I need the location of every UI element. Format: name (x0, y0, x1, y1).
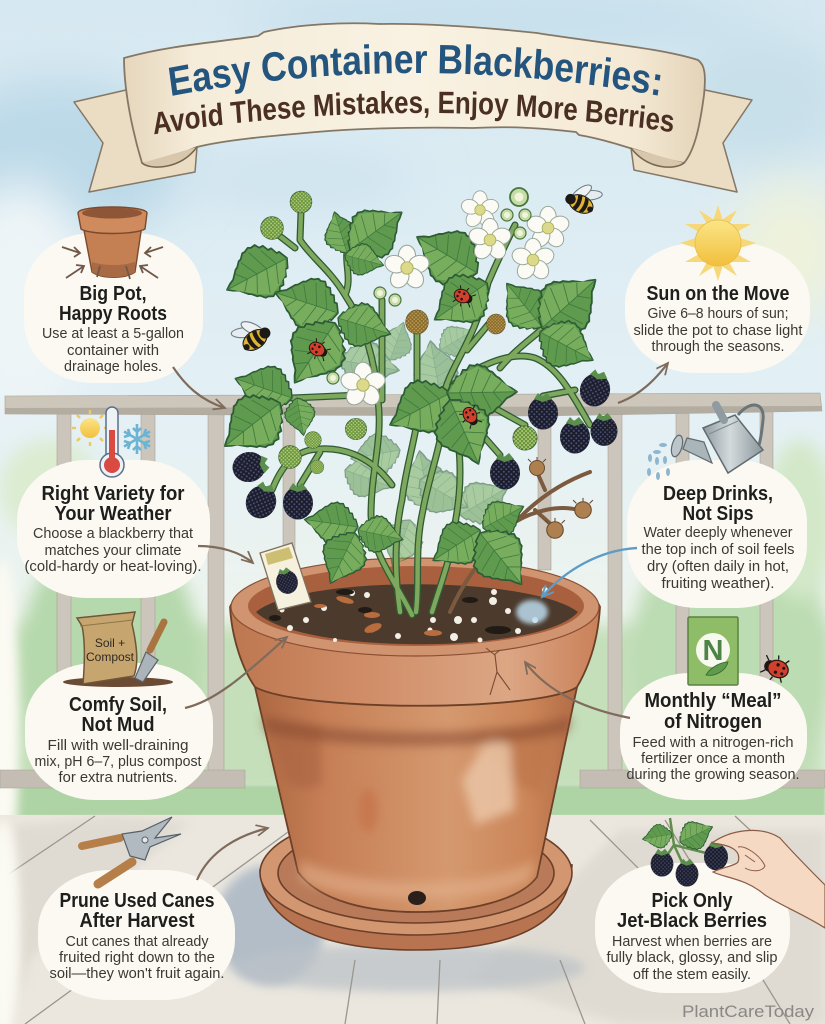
rim cracks (486, 648, 510, 695)
icon: hand picking berries (640, 814, 825, 928)
soil speckles (280, 587, 548, 642)
text block: right variety: Right Variety for (42, 483, 185, 505)
text block: right variety: matches your climate (44, 543, 182, 559)
text block: big pot: Happy Roots (59, 303, 167, 325)
text block: big pot: container with (67, 343, 159, 359)
saucer (260, 811, 572, 950)
water splash (516, 600, 548, 624)
text block: sun: Give 6–8 hours of sun; (648, 306, 788, 322)
text block: deep drinks: Water deeply whenever (644, 525, 793, 541)
banner ribbon (73, 22, 753, 193)
text block: comfy soil: Fill with well-draining (48, 738, 188, 754)
text block: prune: After Harvest (80, 910, 195, 932)
text block: comfy soil: for extra nutrients. (58, 770, 178, 786)
icon: big pot with arrows (62, 207, 163, 279)
text block: monthly meal: Feed with a nitrogen-rich (632, 735, 794, 751)
plant (207, 188, 617, 615)
deck boards (0, 815, 825, 1024)
arrows (173, 363, 668, 880)
text block: monthly meal: Monthly “Meal” (644, 690, 782, 712)
text block: right variety: (cold-hardy or heat-loving). (24, 559, 202, 575)
text block: pick only: off the stem easily. (633, 967, 751, 983)
text block: deep drinks: fruiting weather). (662, 576, 774, 592)
leaves (207, 192, 615, 601)
text block: big pot: Big Pot, (80, 283, 146, 305)
icon: nitrogen fertilizer bag (688, 617, 738, 685)
text block: big pot: drainage holes. (64, 359, 162, 375)
watermark: PlantCareToday (682, 1002, 815, 1021)
soil (256, 584, 578, 644)
icon: soil bag and trowel (63, 612, 173, 687)
text block: prune: Cut canes that already (66, 934, 209, 950)
unripe berries (261, 191, 593, 538)
text block: monthly meal: of Nitrogen (664, 711, 762, 733)
text block: comfy soil: mix, pH 6–7, plus compost (34, 754, 202, 770)
text block: right variety: Your Weather (54, 503, 172, 525)
text block: deep drinks (642, 483, 794, 592)
text block: prune: Prune Used Canes (60, 890, 214, 912)
pot rim (230, 579, 600, 706)
terracotta pot (230, 558, 600, 912)
icon: bee right (562, 176, 607, 219)
watercolor patches (262, 715, 572, 899)
text block: prune: fruited right down to the (59, 950, 215, 966)
text block: comfy soil: Comfy Soil, (69, 694, 167, 716)
blossoms (327, 188, 571, 408)
dead cane (450, 472, 590, 612)
icon: ladybug (759, 651, 792, 685)
text block: sun (634, 283, 802, 355)
text block: monthly meal (626, 690, 800, 783)
icon: soil bag and trowel: Soil + (95, 636, 125, 650)
banner main (124, 23, 705, 163)
text block: big pot (42, 283, 184, 375)
text block: pick only (606, 890, 778, 983)
text block: deep drinks: the top inch of soil feels (642, 542, 794, 558)
text block: sun: slide the pot to chase light (634, 323, 802, 339)
text block: pick only: Jet-Black Berries (617, 910, 767, 932)
text block: prune: soil—they won't fruit again. (50, 966, 224, 982)
banner tails (74, 90, 752, 192)
text block: right variety: Choose a blackberry that (33, 526, 193, 542)
text block: monthly meal: during the growing season. (626, 767, 800, 783)
title line 1: Easy Container Blackberries: (168, 44, 660, 96)
canes (272, 212, 590, 615)
icon: soil bag and trowel: Compost (86, 650, 135, 664)
icon: thermometer, sun, snowflake (72, 407, 150, 477)
ladybugs on leaves (305, 284, 485, 430)
text block: sun: Sun on the Move (646, 283, 790, 305)
banner curls (142, 147, 684, 167)
text block: prune (50, 890, 224, 982)
text block: deep drinks: Not Sips (682, 503, 754, 525)
icon: nitrogen fertilizer bag: N (703, 635, 723, 667)
text block: right variety (24, 483, 202, 575)
text block: pick only: Pick Only (652, 890, 733, 912)
info bubbles backdrop (17, 233, 810, 1000)
text block: sun: through the seasons. (652, 339, 784, 355)
text block: monthly meal: fertilizer once a month (641, 751, 785, 767)
text block: comfy soil (34, 694, 202, 786)
icon: bee left (226, 310, 274, 358)
text block: deep drinks: Deep Drinks, (663, 483, 773, 505)
text block: big pot: Use at least a 5-gallon (42, 326, 184, 342)
text block: pick only: fully black, glossy, and slip (606, 950, 778, 966)
text block: comfy soil: Not Mud (82, 714, 154, 736)
drainage hole (408, 891, 426, 905)
railing (0, 393, 825, 788)
title line 2: Avoid These Mistakes, Enjoy More Berries (154, 90, 674, 134)
icon: pruners (82, 817, 181, 884)
blackberries (230, 367, 618, 523)
pot body (255, 687, 577, 912)
icon: sun (680, 205, 756, 281)
icon: watering can (647, 405, 763, 480)
icon: seed packet (260, 543, 311, 610)
pale background foliage (336, 316, 519, 574)
text block: deep drinks: dry (often daily in hot, (647, 559, 789, 575)
text block: pick only: Harvest when berries are (612, 934, 772, 950)
